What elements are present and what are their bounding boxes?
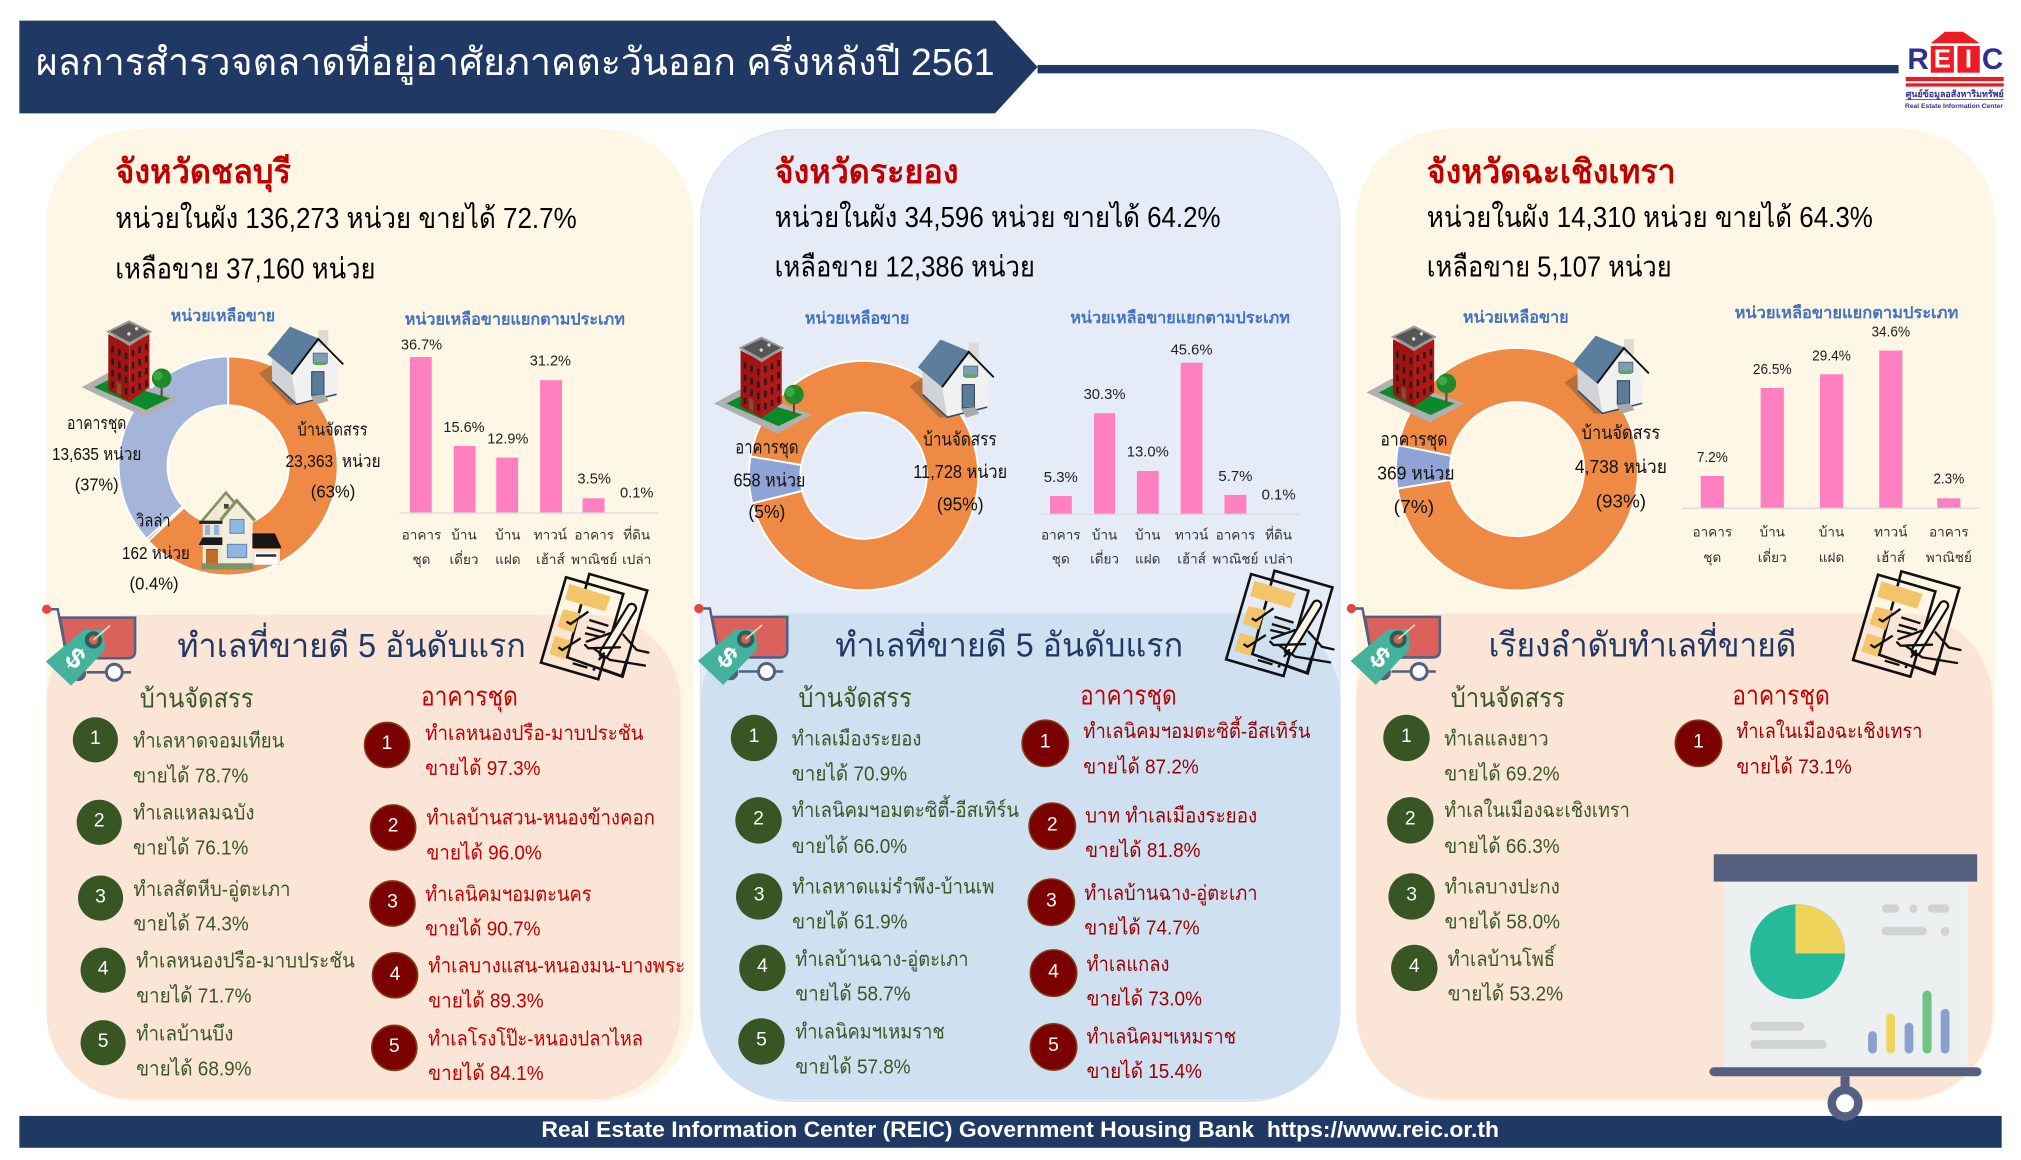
- list: Chonburi housing estates: ทำเลแหลมฉบัง: [133, 802, 254, 825]
- donut label: housing estate: [913, 429, 1007, 514]
- bar chart: Chonburi: 12.9%: [487, 432, 528, 448]
- logo: REIC: I: [1965, 45, 1972, 73]
- list: Chonburi condominiums: ขายได้ 90.7%: [425, 916, 540, 940]
- bar chart: Rayong: อาคาร: [1041, 527, 1081, 542]
- list: Chonburi condominiums: 5: [389, 1036, 400, 1057]
- list: Rayong housing estates: ทำเลหาดแม่รำพึง-บ้านเพ: [792, 875, 995, 898]
- Chachoengsao heading: จังหวัดฉะเชิงเทรา: [1427, 154, 1676, 191]
- bar chart: Rayong: เปล่า: [1264, 551, 1293, 566]
- Rayong remaining stat: เหลือขาย 12,386 หน่วย: [775, 251, 1035, 283]
- list: Chonburi housing estates: ทำเลหาดจอมเทียน: [133, 729, 284, 752]
- list: Chonburi housing estates: 1: [90, 728, 101, 749]
- donut label: villa: 162 หน่วย: [122, 543, 190, 563]
- heading: ranking of best-selling locations: เรียงลำดับทำเลที่ขายดี: [1489, 622, 1796, 665]
- donut label: villa: [122, 511, 190, 594]
- donut label: condominium: (7%): [1394, 496, 1434, 517]
- donut label: condominium: [1377, 428, 1455, 517]
- bar chart: Chachoengsao: 29.4%: [1812, 349, 1851, 365]
- heading: condominium list: อาคารชุด: [1080, 680, 1177, 711]
- heading: top 5 locations: ทำเลที่ขายดี 5 อันดับแรก: [177, 622, 526, 665]
- donut label: housing estate: (95%): [937, 493, 984, 514]
- bar chart: Chachoengsao: บ้าน: [1819, 525, 1844, 540]
- donut chart: Chonburi: [119, 356, 338, 575]
- bar chart: Chachoengsao: 26.5%: [1753, 362, 1792, 378]
- bar chart: Rayong: [1039, 343, 1300, 567]
- donut label: condominium: 658 หน่วย: [734, 470, 805, 491]
- list: Chonburi condominiums: ทำเลนิคมฯอมตะนคร: [425, 883, 592, 906]
- list: Rayong housing estates: ทำเลบ้านฉาง-อู่ตะเภา: [795, 948, 969, 972]
- bar chart: Rayong: ชุด: [1052, 551, 1070, 567]
- bar chart: Rayong: แฝด: [1135, 551, 1160, 566]
- list: Chachoengsao housing estates: 4: [1409, 956, 1420, 977]
- bar chart: Chachoengsao: 34.6%: [1871, 325, 1910, 341]
- bar chart: Chonburi: ทาวน์: [534, 526, 567, 542]
- logo: REIC: R: [1907, 43, 1929, 76]
- list: Rayong housing estates: ขายได้ 58.7%: [795, 982, 911, 1006]
- list: Rayong condominiums: บาท ทำเลเมืองระยอง: [1085, 804, 1257, 827]
- bar chart: Chachoengsao: พาณิชย์: [1926, 549, 1972, 565]
- list: Chonburi housing estates: [73, 717, 355, 1080]
- donut label: housing estate: 4,738 หน่วย: [1575, 456, 1667, 477]
- bar chart: Chachoengsao: ชุด: [1703, 550, 1721, 566]
- donut chart: Chachoengsao: [1396, 348, 1638, 590]
- bar chart: Chonburi: ที่ดิน: [623, 525, 650, 542]
- list: Chachoengsao housing estates: ทำเลแลงยาว: [1444, 728, 1549, 751]
- list: Chachoengsao condominiums: 1: [1693, 732, 1704, 753]
- logo: REIC: E: [1934, 45, 1951, 73]
- list: Chonburi housing estates: ขายได้ 76.1%: [133, 836, 248, 860]
- donut label: condominium: อาคารชุด: [1380, 428, 1447, 451]
- list: Rayong housing estates: 1: [749, 726, 759, 747]
- title: ผลการสำรวจตลาดที่อยู่อาศัยภาคตะวันออก ครึ่งหลังปี 2561: [36, 35, 995, 85]
- heading: top 5 locations: ทำเลที่ขายดี 5 อันดับแรก: [835, 622, 1183, 665]
- list: Chonburi housing estates: ทำเลหนองปรือ-มาบประชัน: [136, 949, 355, 972]
- donut label: condominium: (37%): [75, 475, 119, 495]
- list: Chachoengsao housing estates: ขายได้ 53.2%: [1448, 982, 1563, 1006]
- list: Rayong housing estates: ขายได้ 70.9%: [792, 762, 907, 786]
- bar chart: Chachoengsao: [1682, 325, 1980, 566]
- heading: condominium list: อาคารชุด: [1732, 680, 1830, 711]
- donut chart: Rayong: [749, 361, 978, 590]
- list: Rayong condominiums: [1022, 716, 1311, 1083]
- Chonburi supply stat: หน่วยในผัง 136,273 หน่วย ขายได้ 72.7%: [115, 201, 577, 235]
- donut title: หน่วยเหลือขาย: [1463, 308, 1569, 327]
- list: Rayong condominiums: 1: [1040, 732, 1051, 753]
- list: Rayong housing estates: ขายได้ 61.9%: [792, 909, 908, 933]
- icon: apartment building: [1366, 325, 1465, 422]
- list: Chonburi housing estates: 4: [98, 959, 109, 980]
- footer bar: Real Estate Information Center (REIC) Government Housing Bank https://www.reic.or.th: [541, 1117, 1499, 1142]
- donut label: housing estate: บ้านจัดสรร: [297, 420, 368, 440]
- list: Chachoengsao housing estates: ขายได้ 69.2%: [1444, 762, 1560, 786]
- donut label: housing estate: 11,728 หน่วย: [913, 461, 1007, 482]
- panel: Chachoengsao: [1347, 129, 1995, 1102]
- bar chart: Chonburi: เปล่า: [622, 552, 651, 567]
- donut label: housing estate: บ้านจัดสรร: [923, 429, 997, 450]
- donut label: condominium: [734, 437, 805, 522]
- list: Chonburi condominiums: 2: [388, 816, 398, 837]
- heading: housing estate list: บ้านจัดสรร: [140, 684, 254, 714]
- list: Chachoengsao housing estates: ขายได้ 66.3%: [1444, 834, 1560, 858]
- Rayong heading: จังหวัดระยอง: [775, 154, 959, 191]
- bar chart: Chonburi: ชุด: [413, 552, 430, 568]
- bar chart: Chonburi: 31.2%: [530, 354, 571, 370]
- icon: apartment building: [82, 320, 180, 417]
- list: Chachoengsao housing estates: ทำเลในเมืองฉะเชิงเทรา: [1444, 798, 1630, 822]
- Chachoengsao remaining stat: เหลือขาย 5,107 หน่วย: [1427, 251, 1672, 283]
- list: Chachoengsao condominiums: ทำเลในเมืองฉะเชิงเทรา: [1736, 719, 1922, 743]
- list: Rayong housing estates: ทำเลนิคมฯเหมราช: [795, 1021, 945, 1044]
- list: Chachoengsao housing estates: ทำเลบางปะกง: [1445, 875, 1560, 898]
- list: Chonburi condominiums: 4: [390, 964, 401, 985]
- icon: shopping cart with price tag: [1347, 604, 1440, 685]
- footer bar: [19, 1116, 2002, 1148]
- icon: checklist: [1853, 571, 1960, 677]
- bar chart: Rayong: 30.3%: [1084, 387, 1126, 403]
- bar chart: Chachoengsao: แฝด: [1819, 550, 1844, 565]
- list: Chachoengsao condominiums: [1675, 719, 1922, 778]
- donut label: condominium: 13,635 หน่วย: [52, 444, 141, 464]
- icon: shopping cart with price tag: [42, 605, 135, 686]
- panel: Chachoengsao ranking background: [1356, 614, 1993, 1099]
- donut label: condominium: อาคารชุด: [67, 413, 126, 434]
- bar chart: Chonburi: บ้าน: [495, 527, 521, 542]
- donut label: condominium: (5%): [748, 501, 785, 522]
- list: Rayong housing estates: ขายได้ 66.0%: [792, 834, 907, 858]
- icon: detached house: [1565, 336, 1649, 414]
- bar chart: Rayong: 45.6%: [1171, 343, 1213, 359]
- list: Chonburi condominiums: 3: [387, 892, 398, 913]
- list: Chonburi condominiums: ทำเลบางแสน-หนองมน-บางพระ: [428, 955, 685, 978]
- list: Rayong housing estates: [731, 715, 1019, 1078]
- icon: villa: [199, 493, 282, 569]
- bar chart: Rayong: ทาวน์: [1175, 526, 1208, 542]
- donut label: condominium: อาคารชุด: [735, 437, 798, 460]
- logo: REIC: Real Estate Information Center: [1905, 103, 2003, 110]
- bar chart: Chachoengsao: ทาวน์: [1874, 524, 1908, 540]
- icon: detached house: [909, 339, 994, 418]
- bar chart: Rayong: 0.1%: [1262, 488, 1296, 504]
- bar chart: Rayong: 5.7%: [1218, 469, 1252, 485]
- list: Chonburi condominiums: ขายได้ 96.0%: [426, 840, 542, 864]
- icon: shopping cart with price tag: $: [711, 641, 744, 675]
- panel: Rayong top locations background: [701, 614, 1340, 1099]
- panel: Rayong: [694, 130, 1340, 1101]
- list: Rayong condominiums: ทำเลแกลง: [1087, 953, 1169, 976]
- icon: detached house: [259, 327, 343, 405]
- bar chart: Chonburi: 36.7%: [401, 337, 442, 353]
- donut label: villa: วิลล่า: [136, 511, 171, 531]
- bar chart: Chonburi: อาคาร: [402, 527, 441, 542]
- logo: REIC: [1905, 32, 2004, 110]
- list: Chonburi condominiums: ขายได้ 89.3%: [428, 988, 544, 1012]
- bar chart: Chachoengsao: 2.3%: [1933, 471, 1964, 487]
- list: Chonburi condominiums: [365, 722, 685, 1085]
- list: Rayong condominiums: ทำเลบ้านฉาง-อู่ตะเภา: [1084, 882, 1258, 906]
- list: Chonburi condominiums: ขายได้ 97.3%: [425, 756, 540, 780]
- bar chart: Chonburi: 0.1%: [620, 486, 653, 502]
- list: Rayong condominiums: ขายได้ 73.0%: [1087, 986, 1202, 1010]
- list: Chachoengsao housing estates: 3: [1406, 885, 1417, 906]
- bar chart: Rayong: พาณิชย์: [1212, 550, 1258, 566]
- bar chart: Chachoengsao: เฮ้าส์: [1876, 549, 1905, 565]
- bar chart: Rayong: บ้าน: [1135, 527, 1160, 542]
- bar chart: Chonburi: [400, 337, 659, 568]
- logo: REIC: C: [1982, 43, 2003, 76]
- bar chart: Chachoengsao: เดี่ยว: [1758, 548, 1787, 565]
- heading: housing estate list: บ้านจัดสรร: [798, 683, 912, 713]
- icon: shopping cart with price tag: [694, 604, 787, 685]
- donut label: condominium: 369 หน่วย: [1377, 463, 1455, 484]
- bar chart: Chonburi: 15.6%: [443, 420, 485, 436]
- list: Rayong housing estates: 3: [754, 885, 765, 906]
- bar chart: Rayong: ที่ดิน: [1265, 525, 1292, 542]
- list: Chonburi condominiums: ขายได้ 84.1%: [428, 1061, 544, 1085]
- list: Rayong housing estates: 2: [753, 809, 764, 830]
- Chonburi remaining stat: เหลือขาย 37,160 หน่วย: [115, 253, 376, 285]
- bar chart: Chonburi: บ้าน: [451, 527, 477, 542]
- icon: checklist: [541, 574, 648, 679]
- list: Chachoengsao housing estates: ขายได้ 58.0%: [1445, 909, 1560, 933]
- heading: housing estate list: บ้านจัดสรร: [1451, 683, 1565, 713]
- bar chart: Chachoengsao: 7.2%: [1697, 450, 1728, 466]
- list: Chonburi housing estates: ขายได้ 78.7%: [133, 763, 248, 787]
- bar chart: Chachoengsao: อาคาร: [1929, 525, 1969, 540]
- bar chart: Chachoengsao: อาคาร: [1692, 525, 1732, 540]
- bar chart: Chachoengsao: บ้าน: [1760, 525, 1785, 540]
- donut label: housing estate: บ้านจัดสรร: [1582, 422, 1660, 443]
- Chachoengsao supply stat: หน่วยในผัง 14,310 หน่วย ขายได้ 64.3%: [1427, 200, 1873, 234]
- list: Chonburi condominiums: ทำเลบ้านสวน-หนองข้างคอก: [426, 807, 655, 830]
- list: Chachoengsao condominiums: ขายได้ 73.1%: [1736, 754, 1852, 778]
- list: Chachoengsao housing estates: 2: [1405, 809, 1416, 830]
- bar chart: Chonburi: เฮ้าส์: [536, 551, 565, 567]
- donut title: หน่วยเหลือขาย: [805, 308, 909, 327]
- heading: condominium list: อาคารชุด: [421, 682, 518, 713]
- bar chart: Rayong: เดี่ยว: [1090, 549, 1119, 566]
- list: Chonburi condominiums: ทำเลหนองปรือ-มาบประชัน: [425, 722, 643, 745]
- list: Rayong condominiums: ขายได้ 15.4%: [1087, 1059, 1202, 1083]
- list: Chonburi housing estates: 2: [94, 811, 105, 832]
- list: Rayong housing estates: 5: [756, 1030, 767, 1051]
- bar chart: Chonburi: 3.5%: [577, 471, 611, 487]
- list: Chonburi housing estates: ทำเลสัตหีบ-อู่ตะเภา: [133, 878, 291, 902]
- list: Chonburi housing estates: 5: [98, 1031, 108, 1052]
- list: Chonburi condominiums: 1: [382, 733, 392, 754]
- list: Rayong housing estates: ขายได้ 57.8%: [795, 1054, 911, 1078]
- list: Rayong condominiums: ทำเลนิคมฯอมตะซิตี้-อีสเทิร์น: [1083, 716, 1311, 743]
- list: Rayong housing estates: ทำเลเมืองระยอง: [792, 728, 921, 751]
- list: Rayong condominiums: 2: [1047, 814, 1058, 835]
- donut label: housing estate: 23,363 หน่วย: [285, 451, 381, 471]
- list: Rayong housing estates: 4: [757, 956, 768, 977]
- icon: shopping cart with price tag: $: [1363, 641, 1396, 675]
- bar chart: Chonburi: พาณิชย์: [571, 551, 617, 567]
- list: Rayong condominiums: ขายได้ 81.8%: [1085, 838, 1200, 862]
- donut label: housing estate: (93%): [1596, 490, 1646, 511]
- panel: Chonburi top locations background: [46, 615, 681, 1099]
- icon: presentation board: [1709, 854, 1981, 1117]
- list: Rayong condominiums: ทำเลนิคมฯเหมราช: [1087, 1026, 1236, 1049]
- list: Rayong condominiums: ขายได้ 87.2%: [1083, 754, 1199, 778]
- bar chart: Rayong: 5.3%: [1044, 470, 1078, 486]
- list: Chonburi housing estates: ขายได้ 71.7%: [136, 984, 251, 1008]
- list: Rayong condominiums: 3: [1046, 890, 1057, 911]
- donut label: housing estate: [286, 420, 381, 502]
- bar chart: Chonburi: อาคาร: [574, 527, 614, 542]
- Chonburi heading: จังหวัดชลบุรี: [115, 153, 291, 193]
- panel: Chonburi: [42, 129, 693, 1102]
- list: Rayong housing estates: ทำเลนิคมฯอมตะซิตี้-อีสเทิร์น: [792, 795, 1019, 822]
- list: Rayong condominiums: 4: [1048, 961, 1059, 982]
- donut title: หน่วยเหลือขาย: [171, 306, 275, 325]
- icon: checklist: [1226, 571, 1333, 676]
- bar chart: Rayong: บ้าน: [1092, 527, 1117, 542]
- bar chart: Rayong: อาคาร: [1216, 527, 1255, 542]
- bar chart title: หน่วยเหลือขายแยกตามประเภท: [1070, 308, 1290, 327]
- list: Rayong condominiums: 5: [1048, 1035, 1059, 1056]
- header banner: [19, 21, 1899, 113]
- icon: apartment building: [714, 337, 812, 434]
- bar chart: Rayong: เฮ้าส์: [1177, 550, 1206, 566]
- bar chart: Rayong: 13.0%: [1127, 444, 1169, 460]
- list: Rayong condominiums: ขายได้ 74.7%: [1084, 915, 1200, 939]
- Rayong supply stat: หน่วยในผัง 34,596 หน่วย ขายได้ 64.2%: [775, 200, 1221, 234]
- donut label: housing estate: (63%): [311, 482, 355, 502]
- list: Chachoengsao housing estates: [1383, 715, 1630, 1006]
- bar chart: Chonburi: เดี่ยว: [450, 550, 478, 567]
- list: Chonburi housing estates: 3: [95, 887, 106, 908]
- list: Chonburi housing estates: ขายได้ 74.3%: [133, 912, 249, 936]
- bar chart: Chonburi: แฝด: [495, 552, 521, 567]
- list: Chonburi housing estates: ทำเลบ้านบึง: [136, 1023, 233, 1046]
- donut label: villa: (0.4%): [130, 574, 179, 594]
- bar chart title: หน่วยเหลือขายแยกตามประเภท: [1735, 303, 1958, 322]
- list: Chonburi housing estates: ขายได้ 68.9%: [136, 1056, 251, 1080]
- list: Chachoengsao housing estates: ทำเลบ้านโพธิ์: [1448, 944, 1557, 971]
- donut label: condominium: [52, 413, 141, 495]
- donut label: housing estate: [1575, 422, 1667, 511]
- list: Chachoengsao housing estates: 1: [1401, 726, 1412, 747]
- logo: REIC: ศูนย์ข้อมูลอสังหาริมทรัพย์: [1906, 88, 2004, 100]
- bar chart title: หน่วยเหลือขายแยกตามประเภท: [405, 310, 625, 329]
- icon: shopping cart with price tag: $: [59, 641, 92, 676]
- list: Chonburi condominiums: ทำเลโรงโป๊ะ-หนองปลาไหล: [428, 1026, 643, 1050]
